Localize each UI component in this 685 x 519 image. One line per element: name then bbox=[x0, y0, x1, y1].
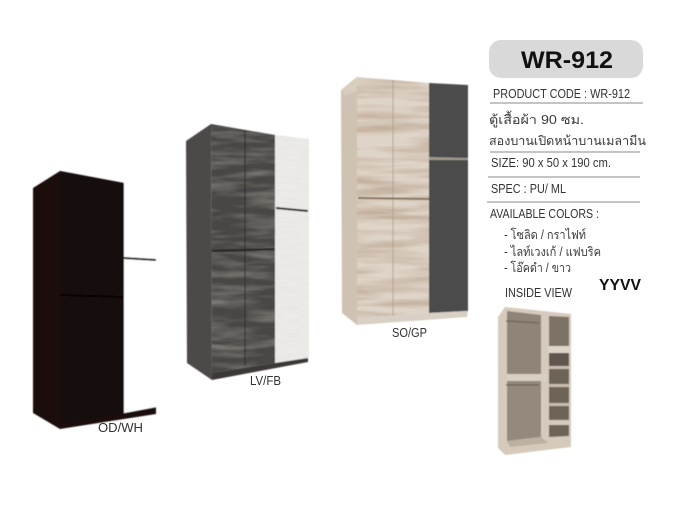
size: SIZE: 90 x 50 x 190 cm. bbox=[491, 156, 611, 170]
side and top panel bbox=[33, 171, 156, 429]
available colors heading: AVAILABLE COLORS : bbox=[490, 207, 599, 221]
plinth bbox=[357, 311, 468, 325]
available colors list: - โซลิด / กราไฟท์ bbox=[504, 227, 586, 242]
front dark doors bbox=[211, 124, 275, 373]
right compartments bbox=[549, 316, 569, 437]
wardrobe: SO/GP bbox=[341, 72, 468, 325]
available colors list bbox=[504, 227, 601, 275]
plinth bbox=[212, 358, 308, 380]
title pill: WR-912 bbox=[521, 47, 613, 74]
description: สองบานเปิดหน้าบานเมลามีน bbox=[489, 134, 646, 148]
description bbox=[489, 110, 646, 148]
shelves and rails bbox=[506, 321, 571, 447]
front dark doors bbox=[60, 171, 124, 425]
label: OD/WH: OD/WH bbox=[98, 421, 143, 435]
door handles bbox=[358, 157, 468, 200]
title pill bbox=[489, 40, 643, 78]
available colors list: - โอ๊คดำ / ขาว bbox=[504, 260, 571, 275]
label: SO/GP: SO/GP bbox=[392, 326, 427, 340]
door handles bbox=[60, 257, 156, 298]
side panel bbox=[341, 77, 357, 325]
top edge bbox=[341, 77, 358, 96]
gray door bbox=[429, 83, 468, 313]
product code: PRODUCT CODE : WR-912 bbox=[493, 87, 630, 101]
carcass bbox=[498, 307, 571, 455]
left hanging compartments bbox=[507, 311, 541, 441]
description: ตู้เสื้อผ้า 90 ซม. bbox=[489, 110, 584, 128]
inside view heading: INSIDE VIEW bbox=[505, 286, 572, 300]
available colors list: - ไลท์เวงเก้ / แฟบริค bbox=[504, 245, 601, 259]
white door bbox=[124, 183, 157, 413]
fabric door bbox=[275, 135, 309, 363]
side panel bbox=[186, 124, 212, 380]
label: LV/FB: LV/FB bbox=[250, 374, 281, 388]
wood doors bbox=[357, 77, 429, 318]
code: YYVV: YYVV bbox=[599, 277, 641, 294]
door handles bbox=[212, 207, 308, 252]
wardrobe: OD/WH bbox=[33, 171, 157, 429]
inside view wardrobe bbox=[498, 307, 571, 455]
wardrobe: LV/FB bbox=[186, 120, 312, 380]
spec: SPEC : PU/ ML bbox=[491, 182, 566, 196]
